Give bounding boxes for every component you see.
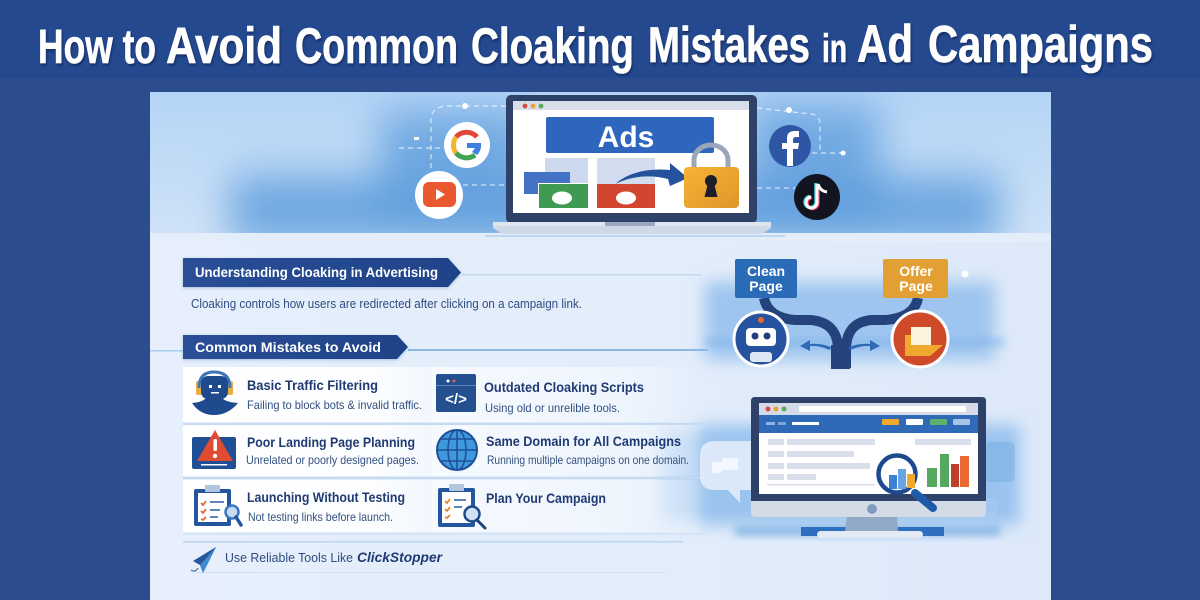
hero illustration: laptop with ads and lock [399, 95, 846, 234]
offer page label: Offer [899, 263, 933, 279]
item: basic traffic filtering: Failing to block bots & invalid traffic. [247, 398, 422, 412]
item: same domain: Same Domain for All Campaigns [486, 433, 681, 449]
icon: globe [437, 430, 477, 470]
item: same domain [437, 430, 689, 470]
main panel [150, 92, 1051, 600]
item: outdated cloaking scripts: Using old or unrelible tools. [485, 401, 620, 415]
title text: Common [295, 18, 458, 74]
icon: plan clipboard [438, 484, 485, 528]
bar chart [927, 454, 969, 487]
title text: in [822, 27, 847, 71]
icon: code window: </> [445, 391, 467, 408]
footer callout [183, 541, 683, 573]
item: launching without testing: Not testing links before launch. [248, 510, 393, 524]
item: same domain: Running multiple campaigns on one domain. [487, 453, 689, 467]
icon: clipboard with magnifier [194, 485, 241, 526]
icon: robot [734, 312, 788, 366]
icon: paper plane [191, 547, 216, 573]
item: plan your campaign [438, 484, 606, 528]
title text: How to [38, 21, 156, 74]
analytics monitor illustration [700, 397, 1015, 538]
section heading: understanding cloaking [183, 258, 461, 287]
ads banner [546, 117, 714, 154]
arrow: left [800, 340, 831, 351]
item: basic traffic filtering [192, 372, 422, 415]
laptop [493, 95, 771, 234]
monitor stand [801, 517, 944, 538]
branching paths [764, 298, 918, 368]
title text [38, 15, 1153, 74]
item: poor landing page planning [192, 430, 419, 469]
item: basic traffic filtering: Basic Traffic Filtering [247, 377, 378, 393]
icon: offer folder [892, 311, 948, 367]
offer page label [883, 259, 948, 298]
icon: google [444, 122, 490, 168]
clean page label: Page [749, 278, 783, 294]
ad thumbnails [524, 158, 655, 209]
title banner [0, 0, 1200, 78]
routing diagram: clean vs offer page [734, 259, 968, 369]
body text: cloaking explanation: Cloaking controls how users are redirected after clicking on a campaign link. [191, 297, 582, 311]
magnifier [878, 456, 933, 508]
chat bubble [700, 441, 751, 503]
clean page label: Clean [747, 263, 785, 279]
item: poor landing page planning: Unrelated or poorly designed pages. [246, 453, 419, 467]
connector dashes [399, 106, 842, 188]
item: launching without testing [194, 485, 405, 526]
mistakes list [183, 367, 703, 535]
item: plan your campaign: Plan Your Campaign [486, 490, 606, 506]
title text: Campaigns [928, 16, 1153, 74]
section heading: understanding cloaking: Understanding Cloaking in Advertising [195, 264, 438, 280]
item: outdated cloaking scripts [436, 374, 644, 415]
item: outdated cloaking scripts: Outdated Cloaking Scripts [484, 379, 644, 395]
icon: code window [436, 374, 476, 412]
section heading: common mistakes: Common Mistakes to Avoid [195, 339, 381, 355]
offer page label: Page [899, 278, 933, 294]
icon: tiktok [794, 174, 840, 220]
title text: Ad [857, 15, 913, 74]
title text: Cloaking [471, 18, 634, 74]
arrow to lock [615, 163, 688, 186]
icon: bot [192, 372, 238, 415]
arrow: right [849, 340, 880, 351]
section heading: common mistakes [183, 335, 408, 359]
footer callout: ClickStopper [357, 549, 444, 565]
icon: facebook [769, 125, 811, 167]
monitor body [751, 397, 986, 517]
item: poor landing page planning: Poor Landing Page Planning [247, 434, 415, 450]
footer callout: Use Reliable Tools Like [225, 550, 353, 565]
padlock icon [684, 145, 739, 208]
title text: Mistakes [648, 17, 810, 73]
row backgrounds [183, 367, 703, 535]
icon: youtube [415, 171, 463, 219]
title text: Avoid [166, 17, 282, 74]
icon: warning [192, 430, 236, 469]
ads banner: Ads [598, 121, 654, 154]
clean page label [735, 259, 797, 298]
item: launching without testing: Launching Without Testing [247, 489, 405, 505]
